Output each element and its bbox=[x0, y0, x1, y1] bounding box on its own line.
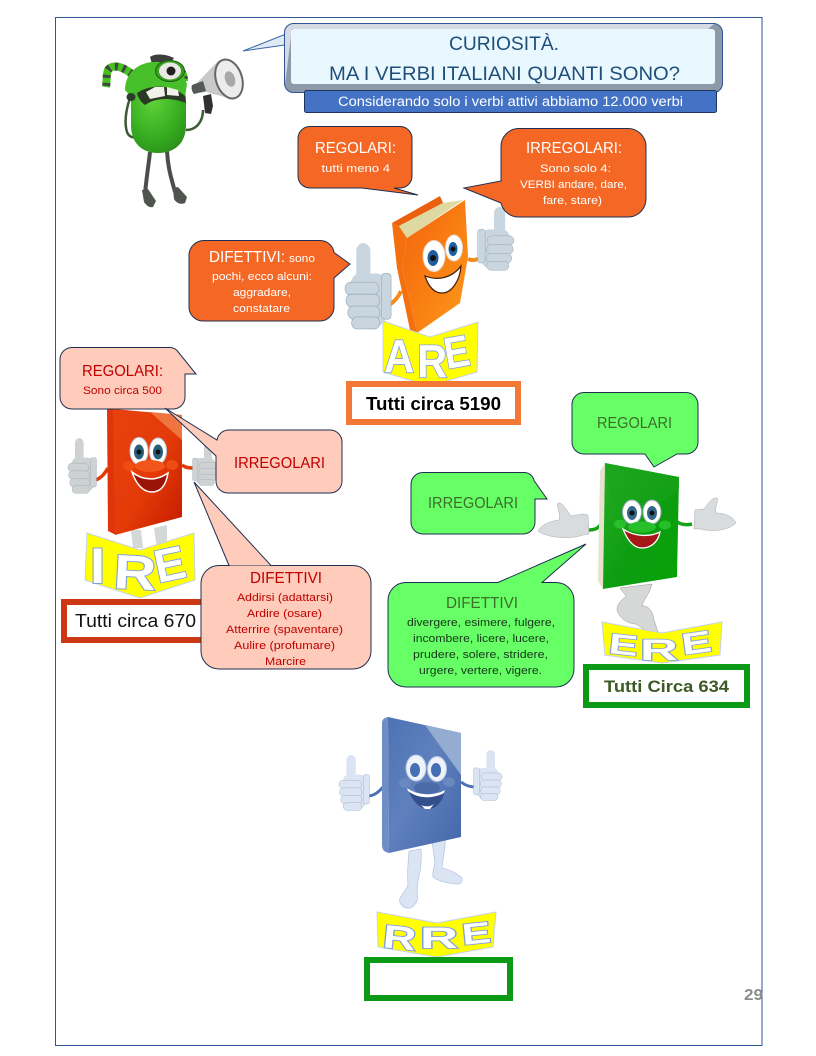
callout: IRE difettivi: Addirsi (adattarsi) bbox=[237, 592, 333, 604]
mascot: green monster with megaphone bbox=[106, 54, 248, 207]
callout: IRE difettivi: DIFETTIVI bbox=[250, 570, 322, 587]
callout: IRE irregolari bbox=[165, 408, 342, 493]
ARE banner: E bbox=[440, 325, 473, 379]
total box: IRE bbox=[64, 602, 224, 640]
callout: IRE difettivi bbox=[194, 482, 371, 669]
legs bbox=[617, 584, 658, 633]
callout: ERE irregolari: IRREGOLARI bbox=[428, 495, 518, 512]
callout: ERE difettivi: DIFETTIVI bbox=[446, 595, 518, 612]
callout: IRE irregolari: IRREGOLARI bbox=[234, 455, 325, 472]
total box: ARE: Tutti circa 5190 bbox=[366, 394, 501, 414]
ERE banner: E bbox=[679, 624, 714, 662]
callout: ARE difettivi: sono bbox=[289, 253, 315, 265]
icon: RRE left hand bbox=[339, 755, 383, 810]
callout: IRE difettivi: Ardire (osare) bbox=[247, 608, 322, 620]
callout: ARE regolari: tutti meno 4 bbox=[322, 163, 390, 175]
icon: RRE right hand bbox=[461, 750, 502, 800]
ARE banner bbox=[383, 321, 478, 387]
RRE banner: R bbox=[381, 919, 418, 958]
callout: ERE difettivi: incombere, licere, lucere, bbox=[413, 633, 549, 645]
callout: IRE difettivi: Marcire bbox=[265, 656, 306, 668]
callout: IRE regolari: REGOLARI: bbox=[82, 363, 163, 380]
ERE banner bbox=[602, 622, 722, 667]
callout: ARE difettivi: constatare bbox=[233, 303, 290, 315]
icon: IRE right hand bbox=[182, 443, 218, 485]
total box: ERE bbox=[586, 667, 747, 705]
ARE book character bbox=[345, 196, 514, 333]
callout: ERE regolari: REGOLARI bbox=[597, 415, 672, 432]
icon: ERE left open hand bbox=[538, 503, 600, 538]
ERE book character bbox=[538, 463, 736, 633]
callout: ERE difettivi bbox=[388, 544, 586, 687]
icon: ERE right open hand bbox=[677, 498, 736, 531]
callout: IRE difettivi: Atterrire (spaventare) bbox=[226, 624, 343, 636]
IRE banner: E bbox=[149, 536, 190, 593]
total box: ARE bbox=[349, 384, 518, 422]
callout: IRE regolari bbox=[60, 348, 196, 409]
IRE banner: I bbox=[90, 538, 105, 595]
callout: ARE difettivi: aggradare, bbox=[233, 287, 291, 299]
ARE banner: A bbox=[384, 331, 414, 382]
IRE book character bbox=[68, 409, 218, 549]
callout: ARE irregolari bbox=[464, 128, 646, 217]
RRE banner: R bbox=[420, 922, 458, 955]
callout: ERE regolari bbox=[572, 392, 698, 467]
callout: ERE difettivi: divergere, esimere, fulgere, bbox=[407, 617, 555, 629]
ARE banner: R bbox=[417, 336, 447, 387]
callout: ARE irregolari: fare, stare) bbox=[543, 195, 602, 207]
header callout bbox=[243, 24, 722, 92]
callout: IRE difettivi: Aulire (profumare) bbox=[234, 640, 335, 652]
ERE banner: E bbox=[607, 628, 640, 662]
callout: ARE difettivi bbox=[189, 240, 350, 321]
callout: ERE difettivi: prudere, solere, stridere, bbox=[413, 649, 548, 661]
total box: RRE (empty) bbox=[367, 960, 510, 998]
callout: ARE irregolari: IRREGOLARI: bbox=[526, 140, 622, 157]
callout: ARE regolari bbox=[298, 126, 418, 195]
header callout: MA I VERBI ITALIANI QUANTI SONO? bbox=[329, 63, 680, 85]
icon: right hand bbox=[468, 207, 514, 270]
header callout: CURIOSITÀ. bbox=[449, 32, 559, 55]
IRE banner bbox=[85, 533, 195, 601]
subtitle bar bbox=[304, 90, 716, 112]
callout: ARE irregolari: Sono solo 4: bbox=[540, 163, 611, 175]
total box: IRE: Tutti circa 670 bbox=[75, 610, 196, 631]
RRE banner: E bbox=[460, 915, 492, 951]
subtitle bar: Considerando solo i verbi attivi abbiamo 12.000 verbi bbox=[338, 94, 683, 109]
RRE book character bbox=[339, 717, 502, 908]
total box: ERE: Tutti Circa 634 bbox=[604, 677, 730, 696]
megaphone bbox=[192, 56, 248, 114]
page number: 29 bbox=[744, 987, 763, 1004]
callout: ERE difettivi: urgere, vertere, vigere. bbox=[419, 665, 542, 677]
RRE banner bbox=[377, 912, 496, 958]
legs bbox=[400, 849, 421, 908]
callout: ARE regolari: REGOLARI: bbox=[315, 140, 396, 157]
callout: IRE regolari: Sono circa 500 bbox=[83, 385, 162, 397]
callout: ERE irregolari bbox=[411, 472, 547, 534]
icon: IRE left hand bbox=[68, 438, 108, 493]
IRE banner: R bbox=[112, 545, 158, 601]
ERE banner: R bbox=[640, 633, 678, 667]
callout: ARE difettivi: DIFETTIVI: bbox=[209, 249, 285, 266]
callout: ARE difettivi: pochi, ecco alcuni: bbox=[212, 271, 312, 283]
callout: ARE irregolari: VERBI andare, dare, bbox=[520, 179, 627, 191]
icon: left hand bbox=[345, 243, 401, 329]
